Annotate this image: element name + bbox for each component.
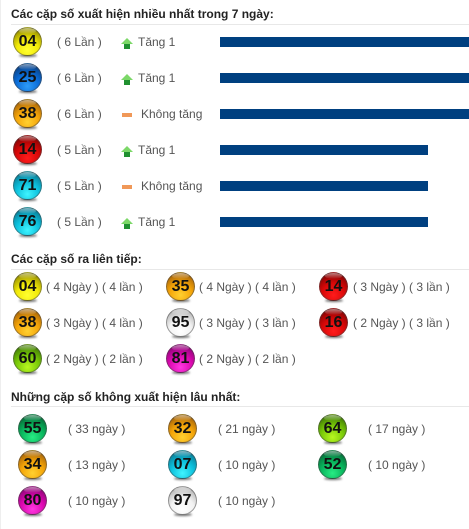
ball 16	[319, 308, 348, 340]
bar 38	[220, 109, 469, 119]
heading: consecutive pairs: Các cặp số ra liên tiếp:	[11, 252, 142, 266]
ball 55: 55	[24, 420, 41, 437]
heading: longest absent pairs: Những cặp số không xuất hiện lâu nhất:	[11, 390, 240, 404]
label 07: ( 10 ngày )	[218, 458, 275, 472]
ball 81: 81	[172, 350, 189, 367]
ball 38: 38	[19, 314, 36, 331]
trend 71: Không tăng	[141, 179, 202, 193]
bar 76	[220, 217, 428, 227]
icon: dash	[122, 185, 132, 189]
label 32: ( 21 ngày )	[218, 422, 275, 436]
label 64: ( 17 ngày )	[368, 422, 425, 436]
ball 80: 80	[24, 492, 41, 509]
label 55: ( 33 ngày )	[68, 422, 125, 436]
ball 07	[168, 450, 197, 482]
label 97: ( 10 ngày )	[218, 494, 275, 508]
bar 71	[220, 181, 428, 191]
ball 04	[13, 27, 42, 58]
label 52: ( 10 ngày )	[368, 458, 425, 472]
ball 64	[318, 414, 347, 446]
ball 64: 64	[324, 420, 341, 437]
ball 95	[166, 308, 195, 340]
label 04: ( 4 Ngày ) ( 4 lần )	[46, 280, 143, 294]
bar 25	[220, 73, 469, 83]
label 35: ( 4 Ngày ) ( 4 lần )	[199, 280, 296, 294]
trend 76: Tăng 1	[138, 215, 175, 229]
trend 25: Tăng 1	[138, 71, 175, 85]
ball 34: 34	[24, 456, 41, 473]
ball 04	[13, 272, 42, 304]
ball 60: 60	[19, 350, 36, 367]
ball 14: 14	[19, 141, 36, 158]
label 16: ( 2 Ngày ) ( 3 lần )	[353, 316, 450, 330]
trend 04: Tăng 1	[138, 35, 175, 49]
ball 60	[13, 344, 42, 376]
count 71: ( 5 Lần )	[57, 179, 102, 193]
ball 97	[168, 486, 197, 518]
ball 04: 04	[19, 33, 36, 50]
ball 32	[168, 414, 197, 446]
ball 14: 14	[325, 278, 342, 295]
ball 38	[13, 308, 42, 340]
bar 04	[220, 37, 469, 47]
bar 14	[220, 145, 428, 155]
label 34: ( 13 ngày )	[68, 458, 125, 472]
ball 35	[166, 272, 195, 304]
icon: up arrow	[121, 74, 133, 85]
count 76: ( 5 Lần )	[57, 215, 102, 229]
ball 25: 25	[19, 69, 36, 86]
icon: up arrow	[121, 38, 133, 49]
ball 95: 95	[172, 314, 189, 331]
ball 16: 16	[325, 314, 342, 331]
label 81: ( 2 Ngày ) ( 2 lần )	[199, 352, 296, 366]
label 14: ( 3 Ngày ) ( 3 lần )	[353, 280, 450, 294]
ball 76: 76	[19, 213, 36, 230]
label 80: ( 10 ngày )	[68, 494, 125, 508]
ball 34	[18, 450, 47, 482]
ball 14	[319, 272, 348, 304]
ball 35: 35	[172, 278, 189, 295]
trend 38: Không tăng	[141, 107, 202, 121]
ball 97: 97	[174, 492, 191, 509]
ball 38	[13, 99, 42, 130]
ball 04: 04	[19, 278, 36, 295]
label 60: ( 2 Ngày ) ( 2 lần )	[46, 352, 143, 366]
ball 25	[13, 63, 42, 94]
ball 38: 38	[19, 105, 36, 122]
ball 14	[13, 135, 42, 166]
ball 55	[18, 414, 47, 446]
ball 52: 52	[324, 456, 341, 473]
icon: up arrow	[121, 146, 133, 157]
heading: most frequent pairs in 7 days: Các cặp số xuất hiện nhiều nhất trong 7 ngày:	[11, 7, 274, 21]
ball 81	[166, 344, 195, 376]
label 38: ( 3 Ngày ) ( 4 lần )	[46, 316, 143, 330]
count 14: ( 5 Lần )	[57, 143, 102, 157]
ball 71: 71	[19, 177, 36, 194]
icon: up arrow	[121, 218, 133, 229]
ball 71	[13, 171, 42, 202]
icon: dash	[122, 113, 132, 117]
ball 80	[18, 486, 47, 518]
ball 07: 07	[174, 456, 191, 473]
ball 32: 32	[174, 420, 191, 437]
trend 14: Tăng 1	[138, 143, 175, 157]
count 04: ( 6 Lần )	[57, 35, 102, 49]
ball 52	[318, 450, 347, 482]
ball 76	[13, 207, 42, 238]
count 38: ( 6 Lần )	[57, 107, 102, 121]
label 95: ( 3 Ngày ) ( 3 lần )	[199, 316, 296, 330]
count 25: ( 6 Lần )	[57, 71, 102, 85]
